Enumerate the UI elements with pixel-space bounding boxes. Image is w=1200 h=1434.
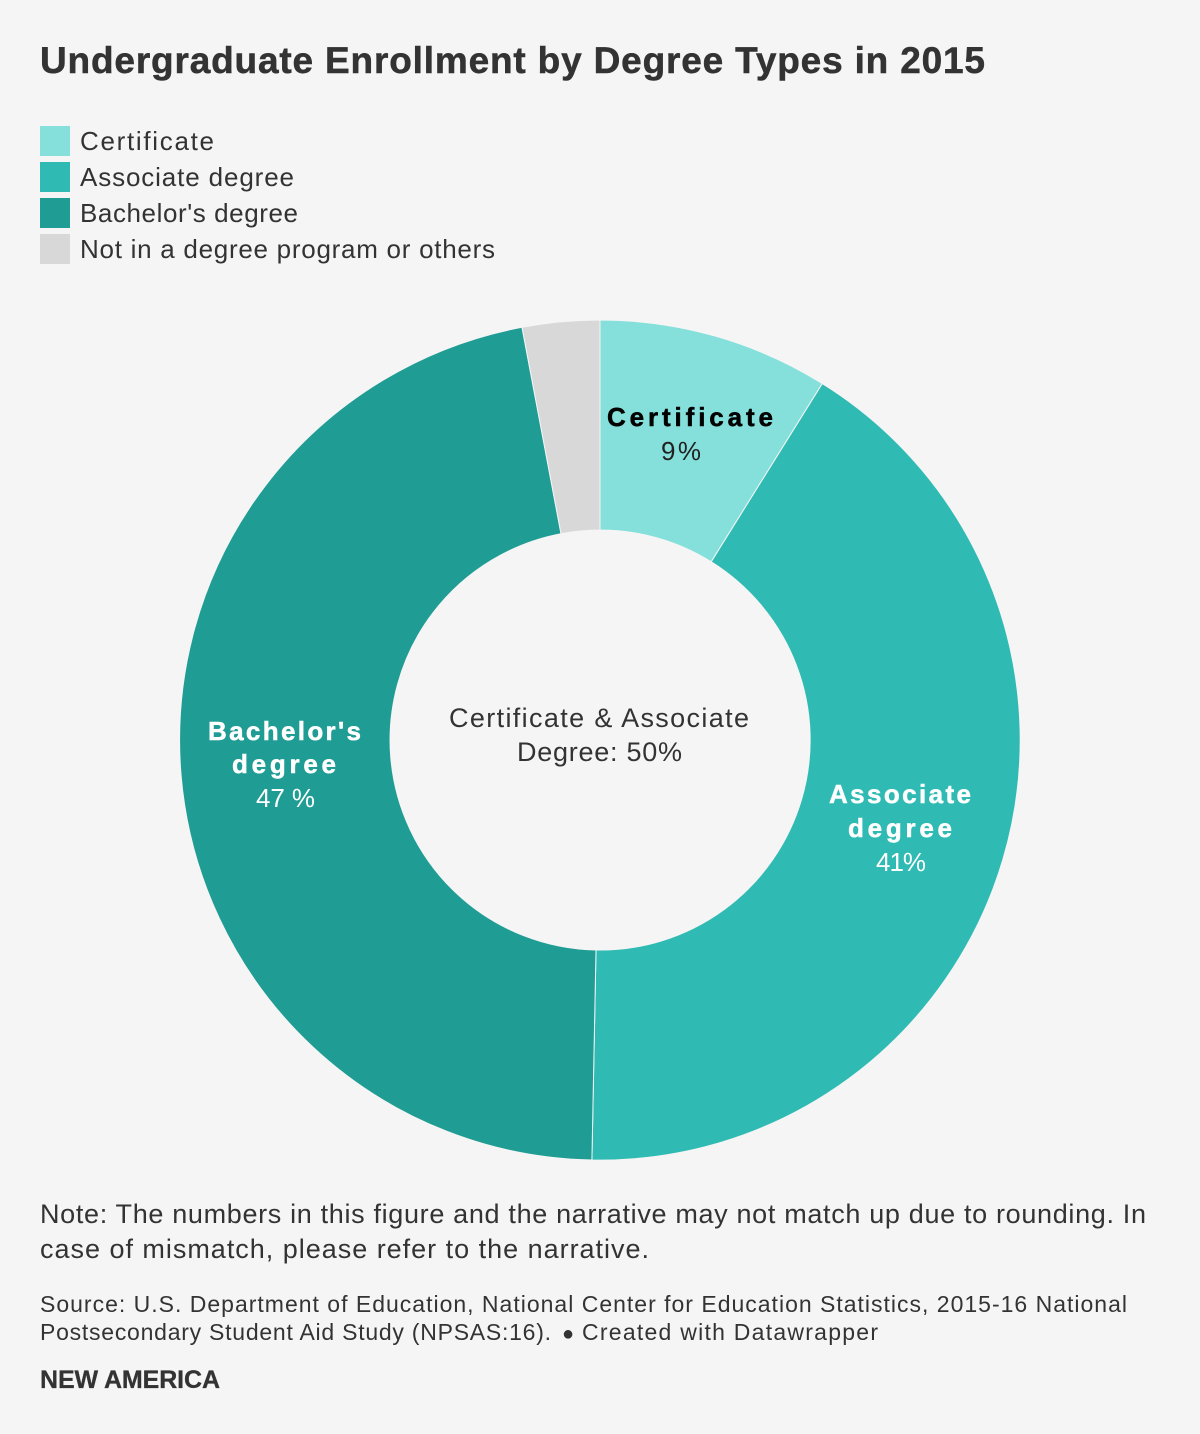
label: associate degree: degree (848, 813, 952, 843)
source: Source: U.S. Department of Education, National Center for Education Statistics, 2015-16 National (40, 1291, 1127, 1317)
legend item: associate degree: Associate degree (80, 162, 294, 192)
legend item: bachelor's degree: Bachelor's degree (80, 198, 298, 228)
note: Note: The numbers in this figure and the narrative may not match up due to rounding. In (40, 1199, 1146, 1229)
source (40, 1291, 1127, 1345)
title: Undergraduate Enrollment by Degree Types in 2015 (40, 40, 985, 81)
center label (449, 703, 749, 767)
label: bachelor's degree (208, 716, 361, 813)
label: certificate (607, 402, 773, 466)
label: certificate: 9% (661, 436, 701, 466)
label: bachelor's degree: 47 % (256, 783, 315, 813)
label: certificate: Certificate (607, 402, 773, 432)
label: associate degree (829, 779, 971, 877)
segment: not in a degree program (522, 320, 600, 534)
source: Created with Datawrapper (582, 1319, 878, 1345)
center label: Degree: 50% (517, 737, 682, 767)
note (40, 1199, 1146, 1264)
note: case of mismatch, please refer to the narrative. (40, 1234, 649, 1264)
source: Postsecondary Student Aid Study (NPSAS:16). (40, 1319, 551, 1345)
label: associate degree: Associate (829, 779, 971, 809)
source: ● (562, 1323, 574, 1345)
segment: associate degree 41% (592, 384, 1020, 1160)
donut chart (180, 320, 1020, 1160)
legend item: certificate: Certificate (80, 126, 214, 156)
legend (40, 126, 495, 264)
label: bachelor's degree: Bachelor's (208, 716, 361, 746)
label: associate degree: 41% (876, 847, 926, 877)
logo: New America: NEW AMERICA (40, 1366, 220, 1394)
segment: certificate 9% (600, 320, 822, 562)
center label: Certificate & Associate (449, 703, 749, 733)
label: bachelor's degree: degree (232, 749, 336, 779)
segment: bachelor's degree 47% (180, 327, 596, 1160)
legend item: not in a degree program: Not in a degree program or others (80, 234, 495, 264)
